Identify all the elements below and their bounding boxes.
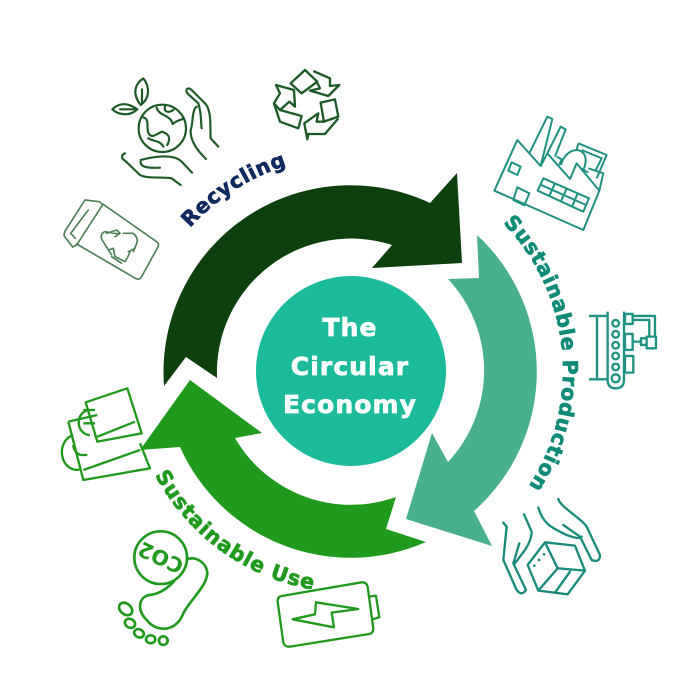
label: Sustainable Production: Sustainable Production xyxy=(504,215,578,490)
icon: recycling bin xyxy=(64,200,159,279)
arrow: sustainable use (bright green) xyxy=(140,380,426,558)
title: The xyxy=(322,313,378,342)
label: Recycling: Recycling xyxy=(180,155,286,227)
icon: conveyor belt xyxy=(589,312,656,388)
arrow: sustainable production (medium green) xyxy=(406,235,537,546)
icon: shopping bags xyxy=(62,388,150,480)
co2 text: CO2 xyxy=(134,537,187,578)
icon: factory xyxy=(494,117,607,230)
center circle xyxy=(256,276,446,466)
title: Economy xyxy=(283,390,417,419)
icon: recycle symbol xyxy=(274,70,339,139)
icon: hands holding box xyxy=(503,499,600,594)
icon: hands holding globe xyxy=(112,78,218,185)
arrow: recycling (dark green) xyxy=(163,173,462,386)
icon: CO2 footprint xyxy=(117,531,207,645)
title: Circular xyxy=(291,352,409,381)
title xyxy=(283,313,417,419)
label: Sustainable Use: Sustainable Use xyxy=(156,470,314,590)
icon: battery xyxy=(278,582,379,647)
